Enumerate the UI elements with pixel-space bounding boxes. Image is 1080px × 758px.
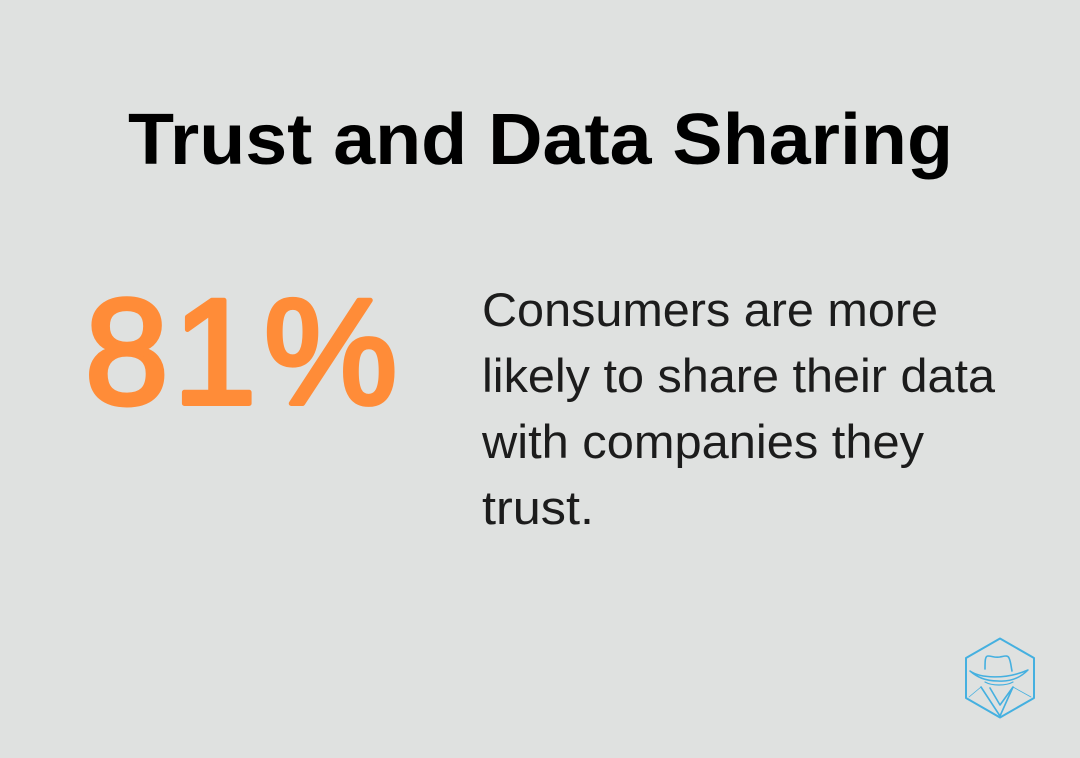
description text: Consumers are more [482,283,938,336]
description text: with companies they [481,415,925,468]
statistic: 81%: 81% [85,268,397,436]
description text: trust. [482,481,594,534]
icon: hexagon spy logo [966,638,1034,718]
title: Trust and Data Sharing [128,100,953,180]
description text: likely to share their data [482,349,996,402]
description text [481,283,996,534]
